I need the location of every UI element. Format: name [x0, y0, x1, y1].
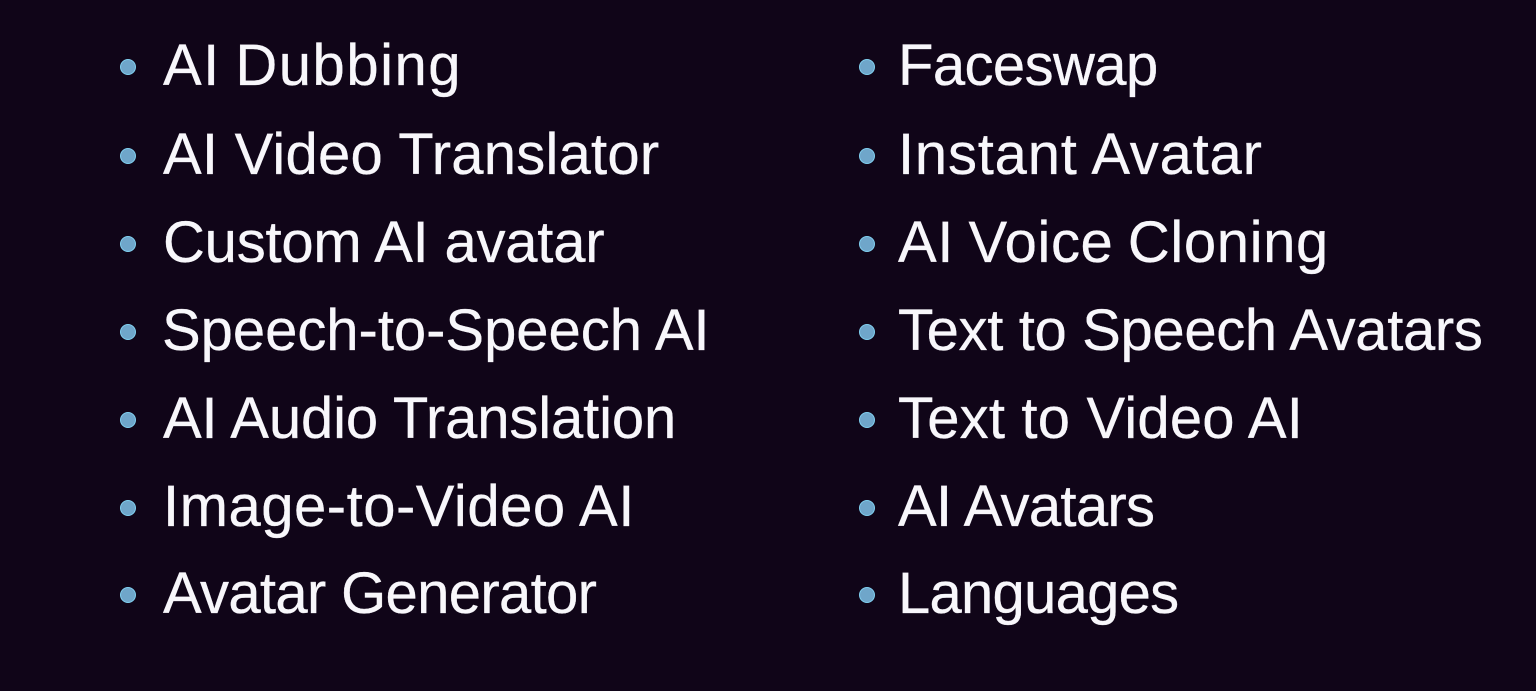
- list item: AI Dubbing: AI Dubbing: [163, 33, 462, 98]
- list item: Faceswap: Faceswap: [898, 33, 1158, 98]
- list item: Text to Video AI: Text to Video AI: [898, 386, 1303, 451]
- list item: AI Video Translator: AI Video Translator: [163, 122, 659, 187]
- list item: Custom AI avatar: Custom AI avatar: [163, 210, 604, 275]
- list item: Text to Speech Avatars: Text to Speech Avatars: [898, 298, 1482, 363]
- right feature list: [859, 33, 1482, 626]
- list item: Speech-to-Speech AI: Speech-to-Speech AI: [162, 298, 710, 363]
- list item: Instant Avatar: Instant Avatar: [898, 122, 1263, 187]
- list item: Image-to-Video AI: Image-to-Video AI: [163, 474, 635, 539]
- list item: Avatar Generator: Avatar Generator: [163, 561, 596, 626]
- list item: Languages: Languages: [898, 561, 1178, 626]
- list item: AI Voice Cloning: AI Voice Cloning: [898, 210, 1329, 275]
- list item: AI Avatars: AI Avatars: [898, 474, 1154, 539]
- left feature list: [120, 33, 710, 626]
- list item: AI Audio Translation: AI Audio Translation: [163, 386, 676, 451]
